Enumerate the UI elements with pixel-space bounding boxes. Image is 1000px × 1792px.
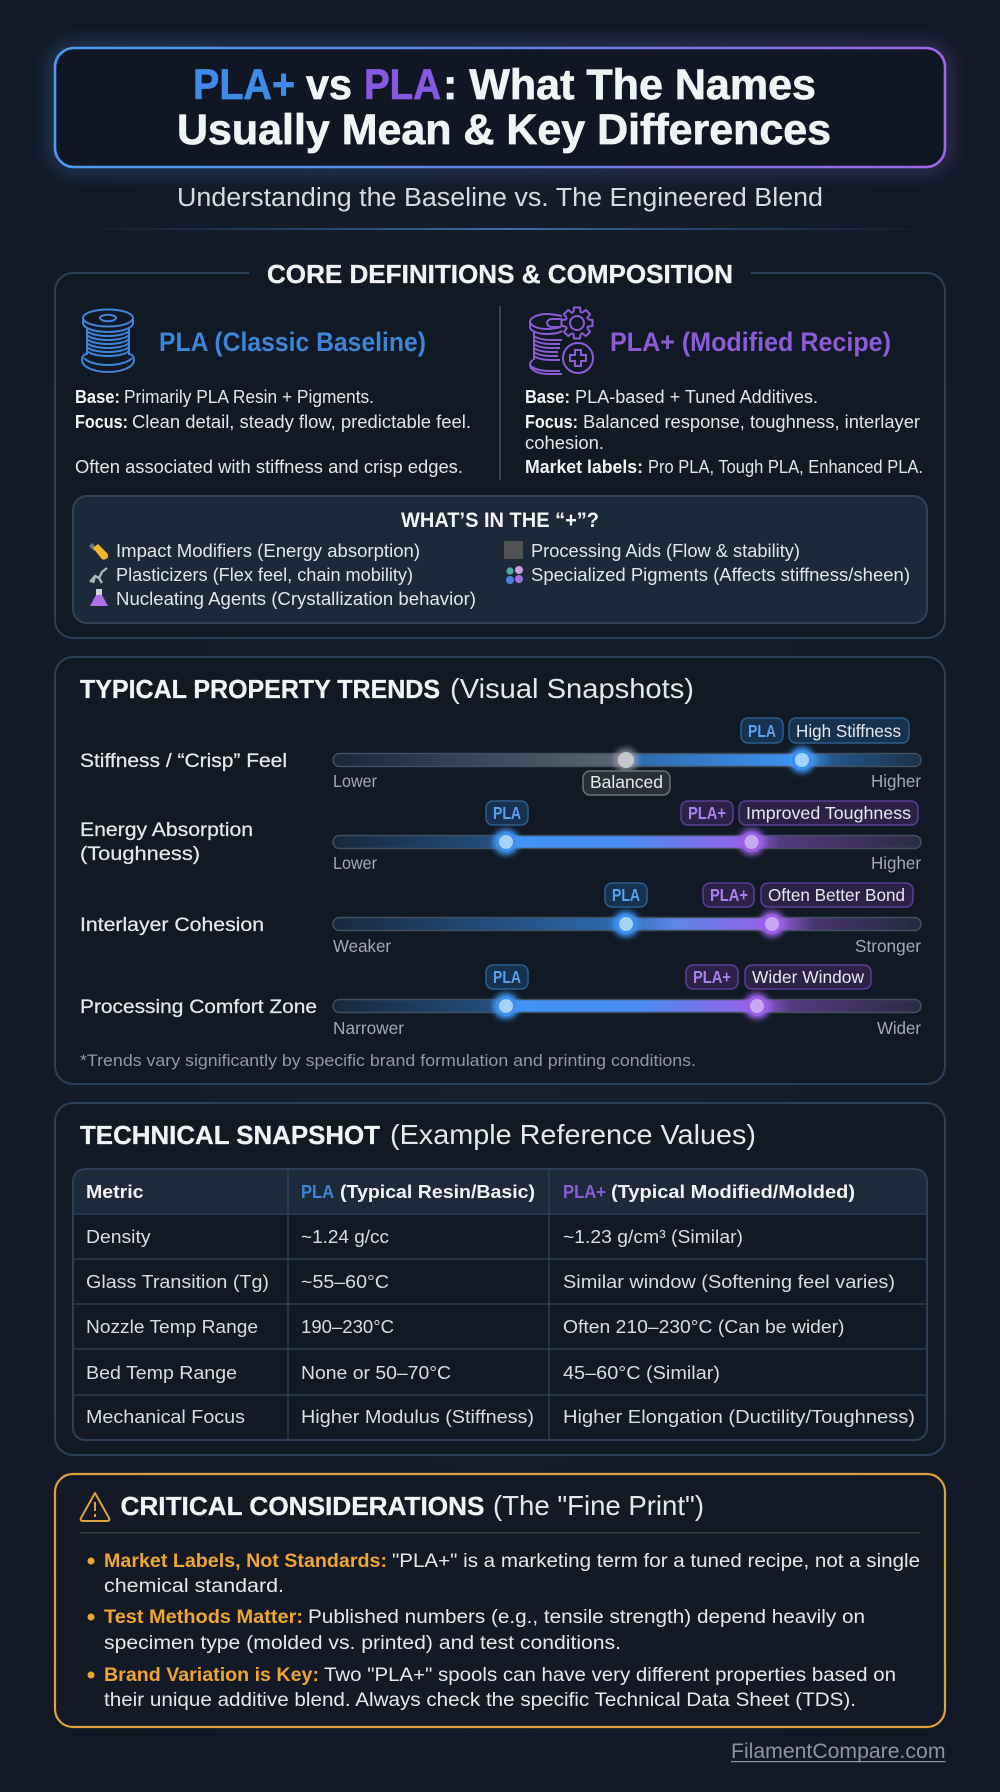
subtitle: Understanding the Baseline vs. The Engineered Blend xyxy=(177,184,823,212)
table row: nozzle temp: 190–230°C xyxy=(301,1316,394,1337)
row: interlayer cohesion: Weaker xyxy=(333,936,391,956)
bullet: test methods xyxy=(88,1607,865,1654)
bullet: brand variation: Brand Variation is Key: xyxy=(104,1665,319,1686)
row: energy absorption: Improved Toughness xyxy=(746,803,911,823)
row: processing comfort zone: Wider Window xyxy=(752,967,864,987)
row: energy absorption: PLA+ xyxy=(688,803,726,823)
text: PLA+ description: Pro PLA, Tough PLA, Enhanced PLA. xyxy=(648,456,923,477)
text: PLA description: Focus: xyxy=(75,411,128,432)
text: specialized pigments: Specialized Pigments (Affects stiffness/sheen) xyxy=(531,564,910,585)
row: interlayer cohesion: PLA xyxy=(612,885,640,905)
text: PLA description: Clean detail, steady flow, predictable feel. xyxy=(132,411,471,432)
row: stiffness xyxy=(80,718,921,795)
panel: core definitions xyxy=(55,259,945,638)
table row: glass transition xyxy=(86,1271,895,1292)
bullet: brand variation: their unique additive blend. Always check the specific Technical Data Sheet (TDS). xyxy=(104,1690,856,1711)
heading: critical considerations: (The "Fine Print") xyxy=(493,1490,704,1521)
bullet: brand variation: Two "PLA+" spools can have very different properties based on xyxy=(324,1665,896,1686)
panel: typical property trends xyxy=(55,657,945,1084)
text: PLA+ description: Base: xyxy=(525,386,570,407)
heading: property trends xyxy=(80,673,694,704)
heading: core definitions: CORE DEFINITIONS & COMPOSITION xyxy=(267,259,733,289)
row: energy absorption: Lower xyxy=(333,853,377,873)
row: processing comfort zone: Wider xyxy=(877,1018,921,1038)
row: energy absorption: Higher xyxy=(871,853,921,873)
table row: glass transition: ~55–60°C xyxy=(301,1271,389,1292)
row: stiffness: Lower xyxy=(333,771,377,791)
heading: PLA+ modified recipe: PLA+ (Modified Recipe) xyxy=(610,327,891,357)
heading: critical considerations xyxy=(120,1490,704,1521)
table header xyxy=(86,1181,855,1202)
text: PLA+ description: Market labels: xyxy=(525,456,643,477)
row: stiffness: High Stiffness xyxy=(796,721,901,741)
heading: technical snapshot xyxy=(80,1119,756,1150)
text: PLA description xyxy=(75,386,471,477)
text: processing aids: Processing Aids (Flow & stability) xyxy=(531,540,800,561)
title: Usually Mean & Key Differences xyxy=(177,106,831,154)
row: stiffness: Balanced xyxy=(590,772,663,792)
row: energy absorption: (Toughness) xyxy=(80,843,200,865)
row: interlayer cohesion: Often Better Bond xyxy=(768,885,905,905)
table header: PLA xyxy=(301,1181,334,1202)
row: stiffness: Higher xyxy=(871,771,921,791)
table row: nozzle temp xyxy=(86,1316,844,1337)
text: PLA+ description: Balanced response, toughness, interlayer xyxy=(583,411,920,432)
row: processing comfort zone: Processing Comfort Zone xyxy=(80,996,317,1018)
table row: nozzle temp: Often 210–230°C (Can be wider) xyxy=(563,1316,844,1337)
table row: glass transition: Glass Transition (Tg) xyxy=(86,1271,269,1292)
heading: technical snapshot: TECHNICAL SNAPSHOT xyxy=(80,1120,380,1150)
table row: nozzle temp: Nozzle Temp Range xyxy=(86,1316,258,1337)
text: PLA+ description: PLA-based + Tuned Additives. xyxy=(575,386,818,407)
title: vs xyxy=(306,61,352,109)
text: impact modifiers: Impact Modifiers (Energy absorption) xyxy=(116,540,420,561)
table row: bed temp xyxy=(86,1362,720,1383)
text: PLA description: Primarily PLA Resin + Pigments. xyxy=(124,386,374,407)
footnote: *Trends vary significantly by specific brand formulation and printing conditions. xyxy=(80,1051,696,1070)
table row: density: ~1.24 g/cc xyxy=(301,1226,389,1247)
text: nucleating agents: Nucleating Agents (Crystallization behavior) xyxy=(116,588,476,609)
icon: PLA spool xyxy=(82,310,134,372)
header title box xyxy=(55,48,945,167)
heading: technical snapshot: (Example Reference Values) xyxy=(390,1119,756,1150)
heading: critical considerations: CRITICAL CONSIDERATIONS xyxy=(120,1491,484,1521)
table row: glass transition: Similar window (Softening feel varies) xyxy=(563,1271,895,1292)
footer link: FilamentCompare.com xyxy=(731,1740,946,1763)
bullet: market labels xyxy=(88,1551,920,1597)
row: processing comfort zone: PLA xyxy=(493,967,521,987)
bullet: market labels: chemical standard. xyxy=(104,1576,284,1597)
icon: plasticizer chain xyxy=(90,568,107,583)
gear teeth xyxy=(562,308,592,338)
bullet: test methods: specimen type (molded vs. printed) and test conditions. xyxy=(104,1633,621,1654)
table row: density: Density xyxy=(86,1226,151,1247)
icon: warning triangle xyxy=(81,1493,109,1521)
row: energy absorption: Energy Absorption xyxy=(80,819,253,841)
icon: flask xyxy=(90,589,108,606)
table header: Metric xyxy=(86,1181,144,1202)
row: interlayer cohesion: Interlayer Cohesion xyxy=(80,914,264,936)
bullet: market labels: "PLA+" is a marketing term for a tuned recipe, not a single xyxy=(392,1551,920,1572)
heading: property trends: TYPICAL PROPERTY TRENDS xyxy=(80,674,440,704)
heading: property trends: (Visual Snapshots) xyxy=(450,673,694,704)
icon: PLA+ spool with gear and plus xyxy=(530,308,593,374)
panel: technical snapshot xyxy=(55,1103,945,1455)
table row: mechanical focus: Higher Modulus (Stiffness) xyxy=(301,1406,534,1427)
table xyxy=(73,1169,927,1440)
text: PLA description: Often associated with stiffness and crisp edges. xyxy=(75,456,463,477)
table row: density xyxy=(86,1226,743,1247)
text: PLA+ description xyxy=(525,386,923,477)
table row: bed temp: None or 50–70°C xyxy=(301,1362,451,1383)
row: processing comfort zone: Narrower xyxy=(333,1018,404,1038)
bullet: test methods: Published numbers (e.g., tensile strength) depend heavily on xyxy=(308,1607,865,1628)
row: processing comfort zone: PLA+ xyxy=(693,967,731,987)
row: energy absorption xyxy=(80,801,921,873)
text: PLA description: Base: xyxy=(75,386,120,407)
table row: mechanical focus: Mechanical Focus xyxy=(86,1406,245,1427)
heading: PLA classic baseline: PLA (Classic Baseline) xyxy=(159,327,426,357)
table row: density: ~1.23 g/cm³ (Similar) xyxy=(563,1226,743,1247)
icon: processing aids xyxy=(504,541,523,559)
panel: critical considerations xyxy=(55,1474,945,1727)
icon: pill xyxy=(89,543,108,560)
table row: mechanical focus xyxy=(86,1406,915,1427)
title: PLA xyxy=(364,61,441,109)
table header: (Typical Resin/Basic) xyxy=(340,1181,535,1202)
row: stiffness: PLA xyxy=(748,721,776,741)
row: processing comfort zone xyxy=(80,965,921,1038)
table header: PLA+ xyxy=(563,1181,606,1202)
table row: mechanical focus: Higher Elongation (Ductility/Toughness) xyxy=(563,1406,915,1427)
row: energy absorption: PLA xyxy=(493,803,521,823)
row: interlayer cohesion: PLA+ xyxy=(710,885,748,905)
text: plasticizers: Plasticizers (Flex feel, chain mobility) xyxy=(116,564,413,585)
title xyxy=(177,61,831,154)
title: : What The Names xyxy=(443,61,816,109)
table row: bed temp: Bed Temp Range xyxy=(86,1362,237,1383)
text: PLA+ description: Focus: xyxy=(525,411,578,432)
panel: what's in the plus xyxy=(73,496,927,623)
row: stiffness: Stiffness / “Crisp” Feel xyxy=(80,750,287,772)
bullet: market labels: Market Labels, Not Standards: xyxy=(104,1551,387,1572)
text: PLA+ description: cohesion. xyxy=(525,432,604,453)
row: interlayer cohesion: Stronger xyxy=(855,936,921,956)
icon: pigments xyxy=(506,566,523,584)
bullet: test methods: Test Methods Matter: xyxy=(104,1607,303,1628)
title: PLA+ xyxy=(193,61,295,109)
heading: what's in the plus: WHAT’S IN THE “+”? xyxy=(401,509,599,532)
table row: bed temp: 45–60°C (Similar) xyxy=(563,1362,720,1383)
row: interlayer cohesion xyxy=(80,883,921,956)
table header: (Typical Modified/Molded) xyxy=(611,1181,855,1202)
bullet: brand variation xyxy=(88,1665,896,1711)
